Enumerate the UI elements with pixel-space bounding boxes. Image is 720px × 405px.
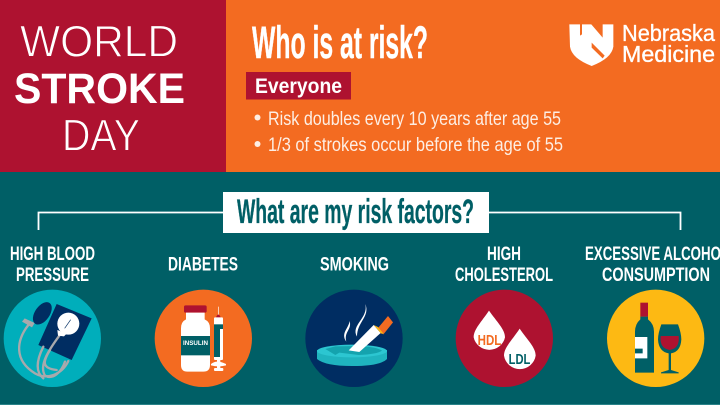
bottom edge line	[0, 404, 720, 405]
text block: risk bullets	[254, 108, 563, 156]
heading: what are my risk factors: What are my risk factors?	[237, 193, 474, 231]
icon: nebraska medicine logo	[569, 20, 716, 67]
labels: risk factor names: HIGH	[487, 243, 521, 265]
icon: wine bottle and glass	[607, 290, 704, 387]
icon: logo shield	[569, 24, 613, 66]
heading: what are my risk factors	[223, 192, 489, 233]
labels: risk factor names: HIGH BLOOD	[10, 243, 95, 265]
labels: risk factor names: CHOLESTEROL	[455, 264, 553, 286]
heading: who is at risk: Who is at risk?	[252, 17, 428, 68]
labels: risk factor names: PRESSURE	[16, 264, 89, 286]
icon: hdl drop: HDL	[478, 332, 501, 349]
heading: stroke: STROKE	[14, 65, 185, 113]
icon: ashtray and cigarette	[305, 290, 403, 387]
callout: everyone: Everyone	[255, 74, 342, 98]
panel: risk factors background	[0, 172, 720, 405]
bracket line	[38, 212, 680, 230]
text block: risk bullets: Risk doubles every 10 years after age 55	[268, 108, 561, 130]
text: logo wordmark	[622, 20, 716, 67]
icon: blood pressure cuff	[4, 290, 101, 387]
panel: who is at risk	[226, 0, 720, 172]
heading: day: DAY	[62, 112, 140, 160]
icon: insulin bottle and syringe	[155, 290, 252, 387]
labels: risk factor names: SMOKING	[320, 254, 389, 276]
icon: insulin bottle and syringe: INSULIN	[183, 341, 208, 347]
text: logo wordmark: Medicine	[622, 41, 715, 67]
labels: risk factor names	[10, 243, 720, 286]
heading: world: WORLD	[20, 18, 178, 66]
text block: risk bullets: 1/3 of strokes occur before the age of 55	[268, 134, 563, 156]
text: logo wordmark: Nebraska	[622, 20, 716, 46]
panel: world stroke day	[0, 0, 226, 172]
icon: ldl drop: LDL	[509, 351, 530, 368]
icon: cholesterol drops	[456, 290, 553, 387]
labels: risk factor names: DIABETES	[168, 254, 238, 276]
